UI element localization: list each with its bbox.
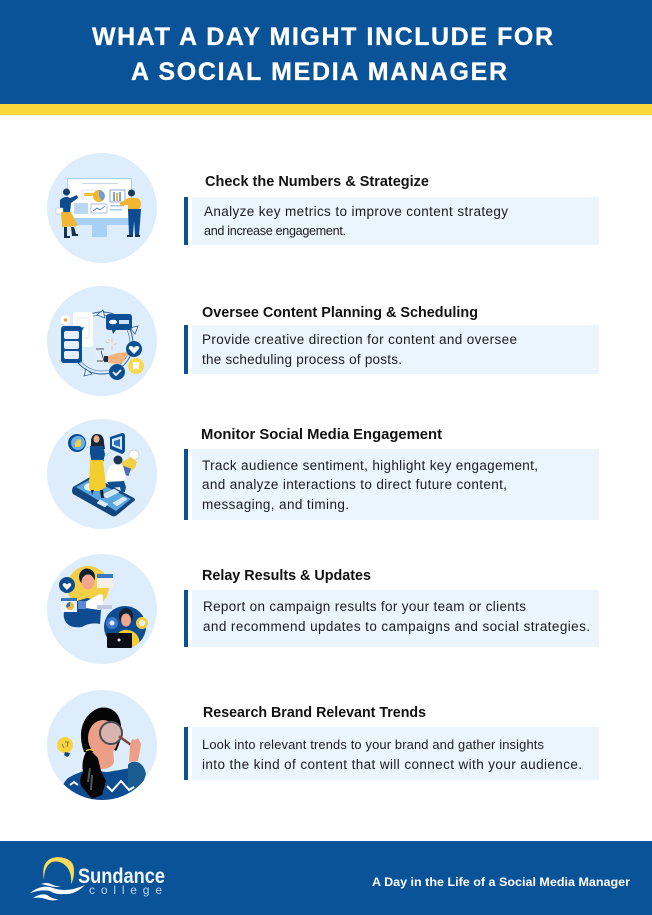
icon: woman with magnifying glass <box>47 690 157 800</box>
header banner <box>0 0 652 115</box>
text block: Track audience sentiment, highlight key engagement, <box>202 458 538 473</box>
text block: the scheduling process of posts. <box>202 352 402 367</box>
text block <box>192 197 599 245</box>
accent bar <box>184 590 188 647</box>
logo: Sundance College <box>30 857 165 900</box>
icon: content planning cycle <box>47 286 157 396</box>
text block: Provide creative direction for content and oversee <box>202 332 517 347</box>
logo: Sundance College: college <box>89 883 162 897</box>
text block <box>192 325 599 374</box>
icon: analytics dashboard with two people <box>47 153 157 263</box>
text block: Analyze key metrics to improve content strategy <box>204 204 508 219</box>
panel: content planning <box>47 286 599 396</box>
text block <box>192 590 599 647</box>
panel: research trends <box>47 690 599 800</box>
text block: Look into relevant trends to your brand and gather insights <box>202 737 544 752</box>
footer caption: A Day in the Life of a Social Media Manager <box>372 877 631 889</box>
title: A SOCIAL MEDIA MANAGER <box>131 58 507 86</box>
footer banner <box>0 841 652 915</box>
panel: check the numbers <box>47 153 599 263</box>
heading: Monitor Social Media Engagement <box>201 427 442 443</box>
heading: Oversee Content Planning & Scheduling <box>202 305 478 321</box>
title: WHAT A DAY MIGHT INCLUDE FOR <box>92 23 553 51</box>
text block: messaging, and timing. <box>202 497 349 512</box>
heading: Check the Numbers & Strategize <box>205 174 429 190</box>
text block: and increase engagement. <box>204 224 346 238</box>
panel: relay results <box>47 554 599 664</box>
text block: and analyze interactions to direct future content, <box>202 477 507 492</box>
logo: Sundance College: Sundance <box>78 865 165 888</box>
heading: Research Brand Relevant Trends <box>203 705 426 721</box>
text block: Report on campaign results for your team or clients <box>203 599 526 614</box>
title <box>92 23 553 86</box>
icon: people on a giant smartphone <box>47 419 157 529</box>
accent bar <box>184 325 188 374</box>
text block <box>192 449 599 520</box>
icon: man with megaphone and woman with laptop <box>47 554 157 664</box>
accent bar <box>184 449 188 520</box>
heading: Relay Results & Updates <box>202 568 371 584</box>
accent bar <box>184 197 188 245</box>
text block <box>192 727 599 780</box>
text block: and recommend updates to campaigns and social strategies. <box>203 619 590 634</box>
panel: monitor engagement <box>47 419 599 529</box>
accent bar <box>184 727 188 780</box>
text block: into the kind of content that will connect with your audience. <box>202 757 582 772</box>
